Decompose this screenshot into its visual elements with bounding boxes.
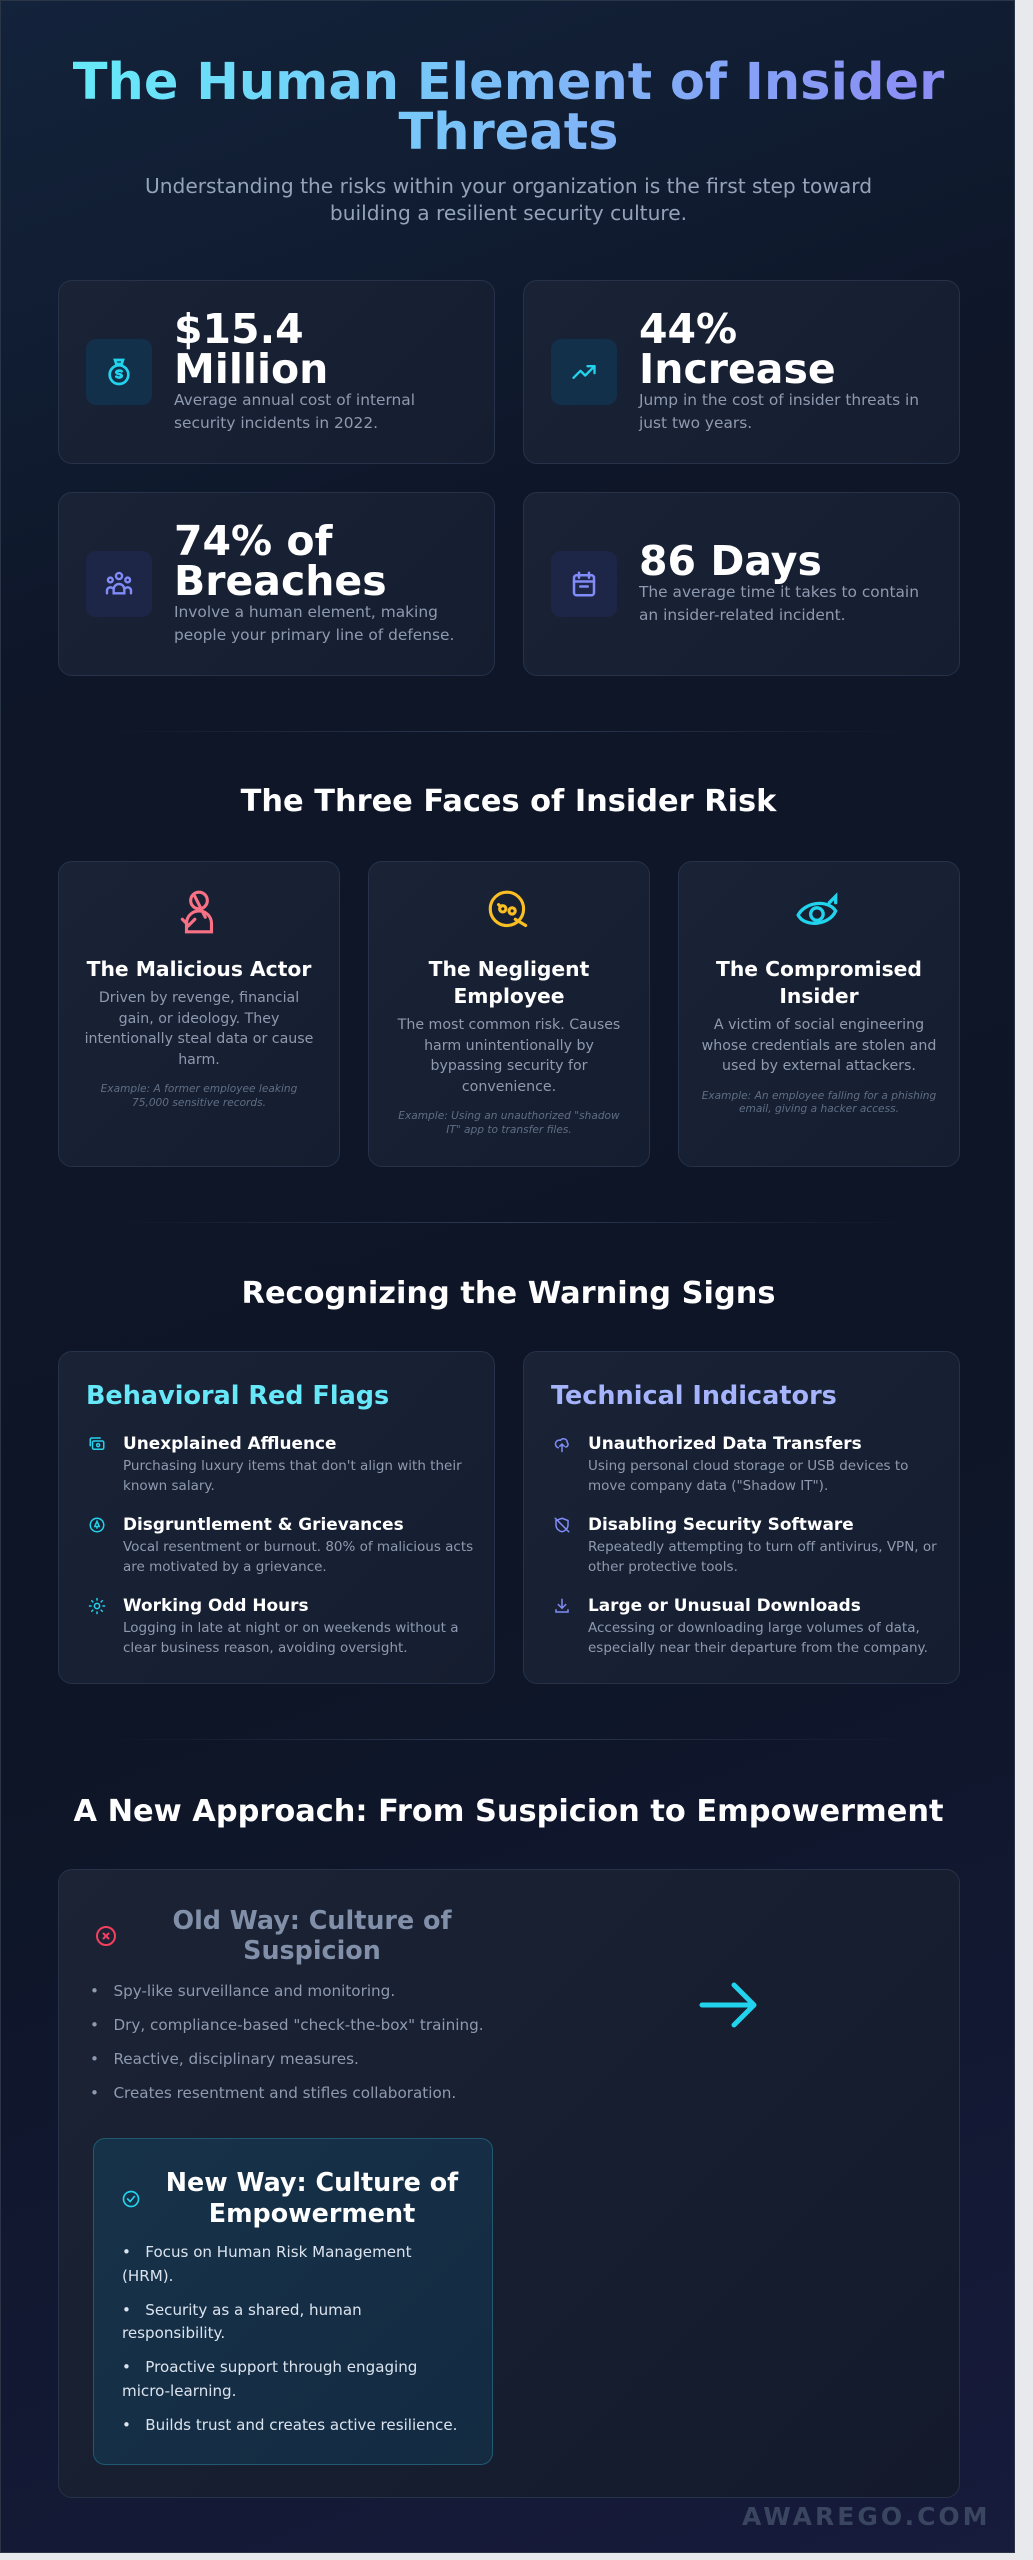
- title: [1, 58, 1016, 158]
- item: transfers: Using personal cloud storage or USB devices to move company data ("Shadow IT").: [588, 1458, 908, 1494]
- panel: behavioral red flags: [58, 1351, 495, 1684]
- card: negligent employee: The Negligent: [429, 957, 589, 981]
- card: negligent employee: IT" app to transfer files.: [446, 1124, 572, 1136]
- heading: new approach: A New Approach: From Suspicion to Empowerment: [74, 1794, 944, 1829]
- old way heading: [172, 1905, 452, 1965]
- stat card: days: 86 Days: [639, 536, 822, 584]
- new way box: [93, 2138, 493, 2465]
- card: malicious actor: [58, 861, 340, 1167]
- card: malicious actor: 75,000 sensitive records.: [132, 1096, 266, 1108]
- item: odd hours: Logging in late at night or on weekends without a clear business reason, avoiding oversight.: [123, 1620, 459, 1656]
- old way bullets: • Reactive, disciplinary measures.: [90, 2050, 359, 2068]
- card: malicious actor: intentionally steal data or cause: [85, 1031, 313, 1047]
- brand footer: AWAREGO.COM: [742, 2502, 991, 2531]
- card: compromised insider: The Compromised: [716, 957, 922, 981]
- new way heading: Empowerment: [209, 2198, 415, 2228]
- icon: negligent: [488, 890, 528, 928]
- old way bullets: • Spy-like surveillance and monitoring.: [90, 1982, 395, 2000]
- icon: check circle: [122, 2190, 140, 2208]
- icon: trending up: [551, 339, 617, 405]
- item: odd hours: Working Odd Hours: [123, 1595, 309, 1615]
- new way bullets: (HRM).: [122, 2266, 173, 2284]
- new way bullets: • Focus on Human Risk Management: [122, 2243, 412, 2261]
- card: malicious actor: harm.: [178, 1052, 220, 1068]
- item: transfers: [554, 1433, 908, 1494]
- item: disabling: Disabling Security Software: [588, 1514, 854, 1534]
- card: negligent employee: bypassing security for: [430, 1058, 588, 1074]
- stat card: days: [523, 492, 960, 676]
- subtitle: Understanding the risks within your organization is the first step toward: [145, 174, 872, 198]
- icon: x circle: [96, 1926, 116, 1946]
- card: malicious actor: Driven by revenge, financial: [99, 990, 299, 1006]
- new way bullets: • Proactive support through engaging: [122, 2358, 417, 2376]
- item: downloads: [555, 1595, 928, 1656]
- panel: technical indicators: [523, 1351, 960, 1684]
- card: compromised insider: email, giving a hacker access.: [739, 1103, 899, 1115]
- stat card: increase: 44% Increase: [639, 304, 836, 392]
- item: affluence: [90, 1433, 462, 1494]
- panel: technical indicators: Technical Indicators: [551, 1381, 837, 1411]
- stat card: breaches: [58, 492, 495, 676]
- card: malicious actor: gain, or ideology. They: [119, 1010, 279, 1026]
- card: negligent employee: The most common risk. Causes: [398, 1017, 620, 1033]
- item: disabling: Repeatedly attempting to turn off antivirus, VPN, or other protective tools.: [588, 1539, 937, 1575]
- subtitle: [145, 174, 872, 225]
- new way heading: [166, 2167, 458, 2228]
- old way heading: Suspicion: [243, 1935, 381, 1965]
- new way bullets: • Security as a shared, human: [122, 2300, 362, 2318]
- card: negligent employee: Example: Using an unauthorized "shadow: [398, 1110, 620, 1122]
- item: affluence: Unexplained Affluence: [123, 1433, 337, 1453]
- item: affluence: Purchasing luxury items that don't align with their known salary.: [123, 1458, 462, 1494]
- card: compromised insider: Example: An employee falling for a phishing: [702, 1090, 936, 1102]
- new way bullets: [122, 2243, 457, 2434]
- panel: approach comparison: [58, 1869, 960, 2498]
- icon: eye: [796, 892, 838, 925]
- item: disgruntlement: [90, 1514, 473, 1575]
- item: disgruntlement: Disgruntlement & Grievances: [123, 1514, 404, 1534]
- stat card: increase: Jump in the cost of insider threats in just two years.: [639, 390, 919, 432]
- item: disabling: [554, 1514, 937, 1575]
- card: negligent employee: [368, 861, 650, 1167]
- item: downloads: Large or Unusual Downloads: [588, 1595, 861, 1615]
- panel: behavioral red flags: Behavioral Red Flags: [86, 1381, 389, 1411]
- stat card: increase: [523, 280, 960, 464]
- stat card: breaches: 74% of Breaches: [174, 516, 387, 604]
- heading: three faces: The Three Faces of Insider Risk: [241, 784, 776, 819]
- card: compromised insider: [678, 861, 960, 1167]
- stat card: cost: Average annual cost of internal security incidents in 2022.: [174, 390, 415, 432]
- icon: money bag: [86, 339, 152, 405]
- stat card: breaches: Involve a human element, making people your primary line of defense.: [174, 602, 454, 644]
- old way bullets: [90, 1982, 484, 2102]
- item: disgruntlement: Vocal resentment or burnout. 80% of malicious acts are motivated by a grievance.: [123, 1539, 473, 1575]
- icon: calendar: [551, 551, 617, 617]
- new way bullets: responsibility.: [122, 2324, 225, 2342]
- new way heading: New Way: Culture of: [166, 2167, 458, 2197]
- old way bullets: • Creates resentment and stifles collaboration.: [90, 2084, 456, 2102]
- card: negligent employee: convenience.: [462, 1078, 556, 1094]
- old way bullets: • Dry, compliance-based "check-the-box" training.: [90, 2016, 484, 2034]
- title: Threats: [398, 103, 618, 162]
- new way bullets: • Builds trust and creates active resilience.: [122, 2416, 457, 2434]
- card: malicious actor: Example: A former employee leaking: [101, 1083, 297, 1095]
- icon: malicious: [180, 890, 214, 934]
- stat card: days: The average time it takes to contain an insider-related incident.: [639, 582, 919, 624]
- title: The Human Element of Insider: [73, 53, 944, 112]
- stat card: cost: [58, 280, 495, 464]
- item: odd hours: [88, 1595, 459, 1656]
- subtitle: building a resilient security culture.: [330, 201, 687, 225]
- card: compromised insider: A victim of social engineering: [714, 1017, 924, 1033]
- icon: users: [86, 551, 152, 617]
- card: negligent employee: harm unintentionally by: [424, 1038, 594, 1054]
- card: malicious actor: The Malicious Actor: [87, 957, 311, 981]
- new way bullets: micro-learning.: [122, 2382, 236, 2400]
- item: downloads: Accessing or downloading large volumes of data, especially near their departure from the company.: [588, 1620, 928, 1656]
- old way: [90, 1905, 484, 2102]
- card: compromised insider: whose credentials are stolen and: [702, 1038, 936, 1054]
- item: transfers: Unauthorized Data Transfers: [588, 1433, 862, 1453]
- card: negligent employee: Employee: [453, 984, 565, 1008]
- card: compromised insider: Insider: [779, 984, 859, 1008]
- heading: warning signs: Recognizing the Warning Signs: [242, 1276, 775, 1311]
- stat card: cost: $15.4 Million: [174, 304, 328, 392]
- arrow: [700, 1982, 756, 2028]
- old way heading: Old Way: Culture of: [172, 1905, 452, 1935]
- card: compromised insider: used by external attackers.: [722, 1058, 916, 1074]
